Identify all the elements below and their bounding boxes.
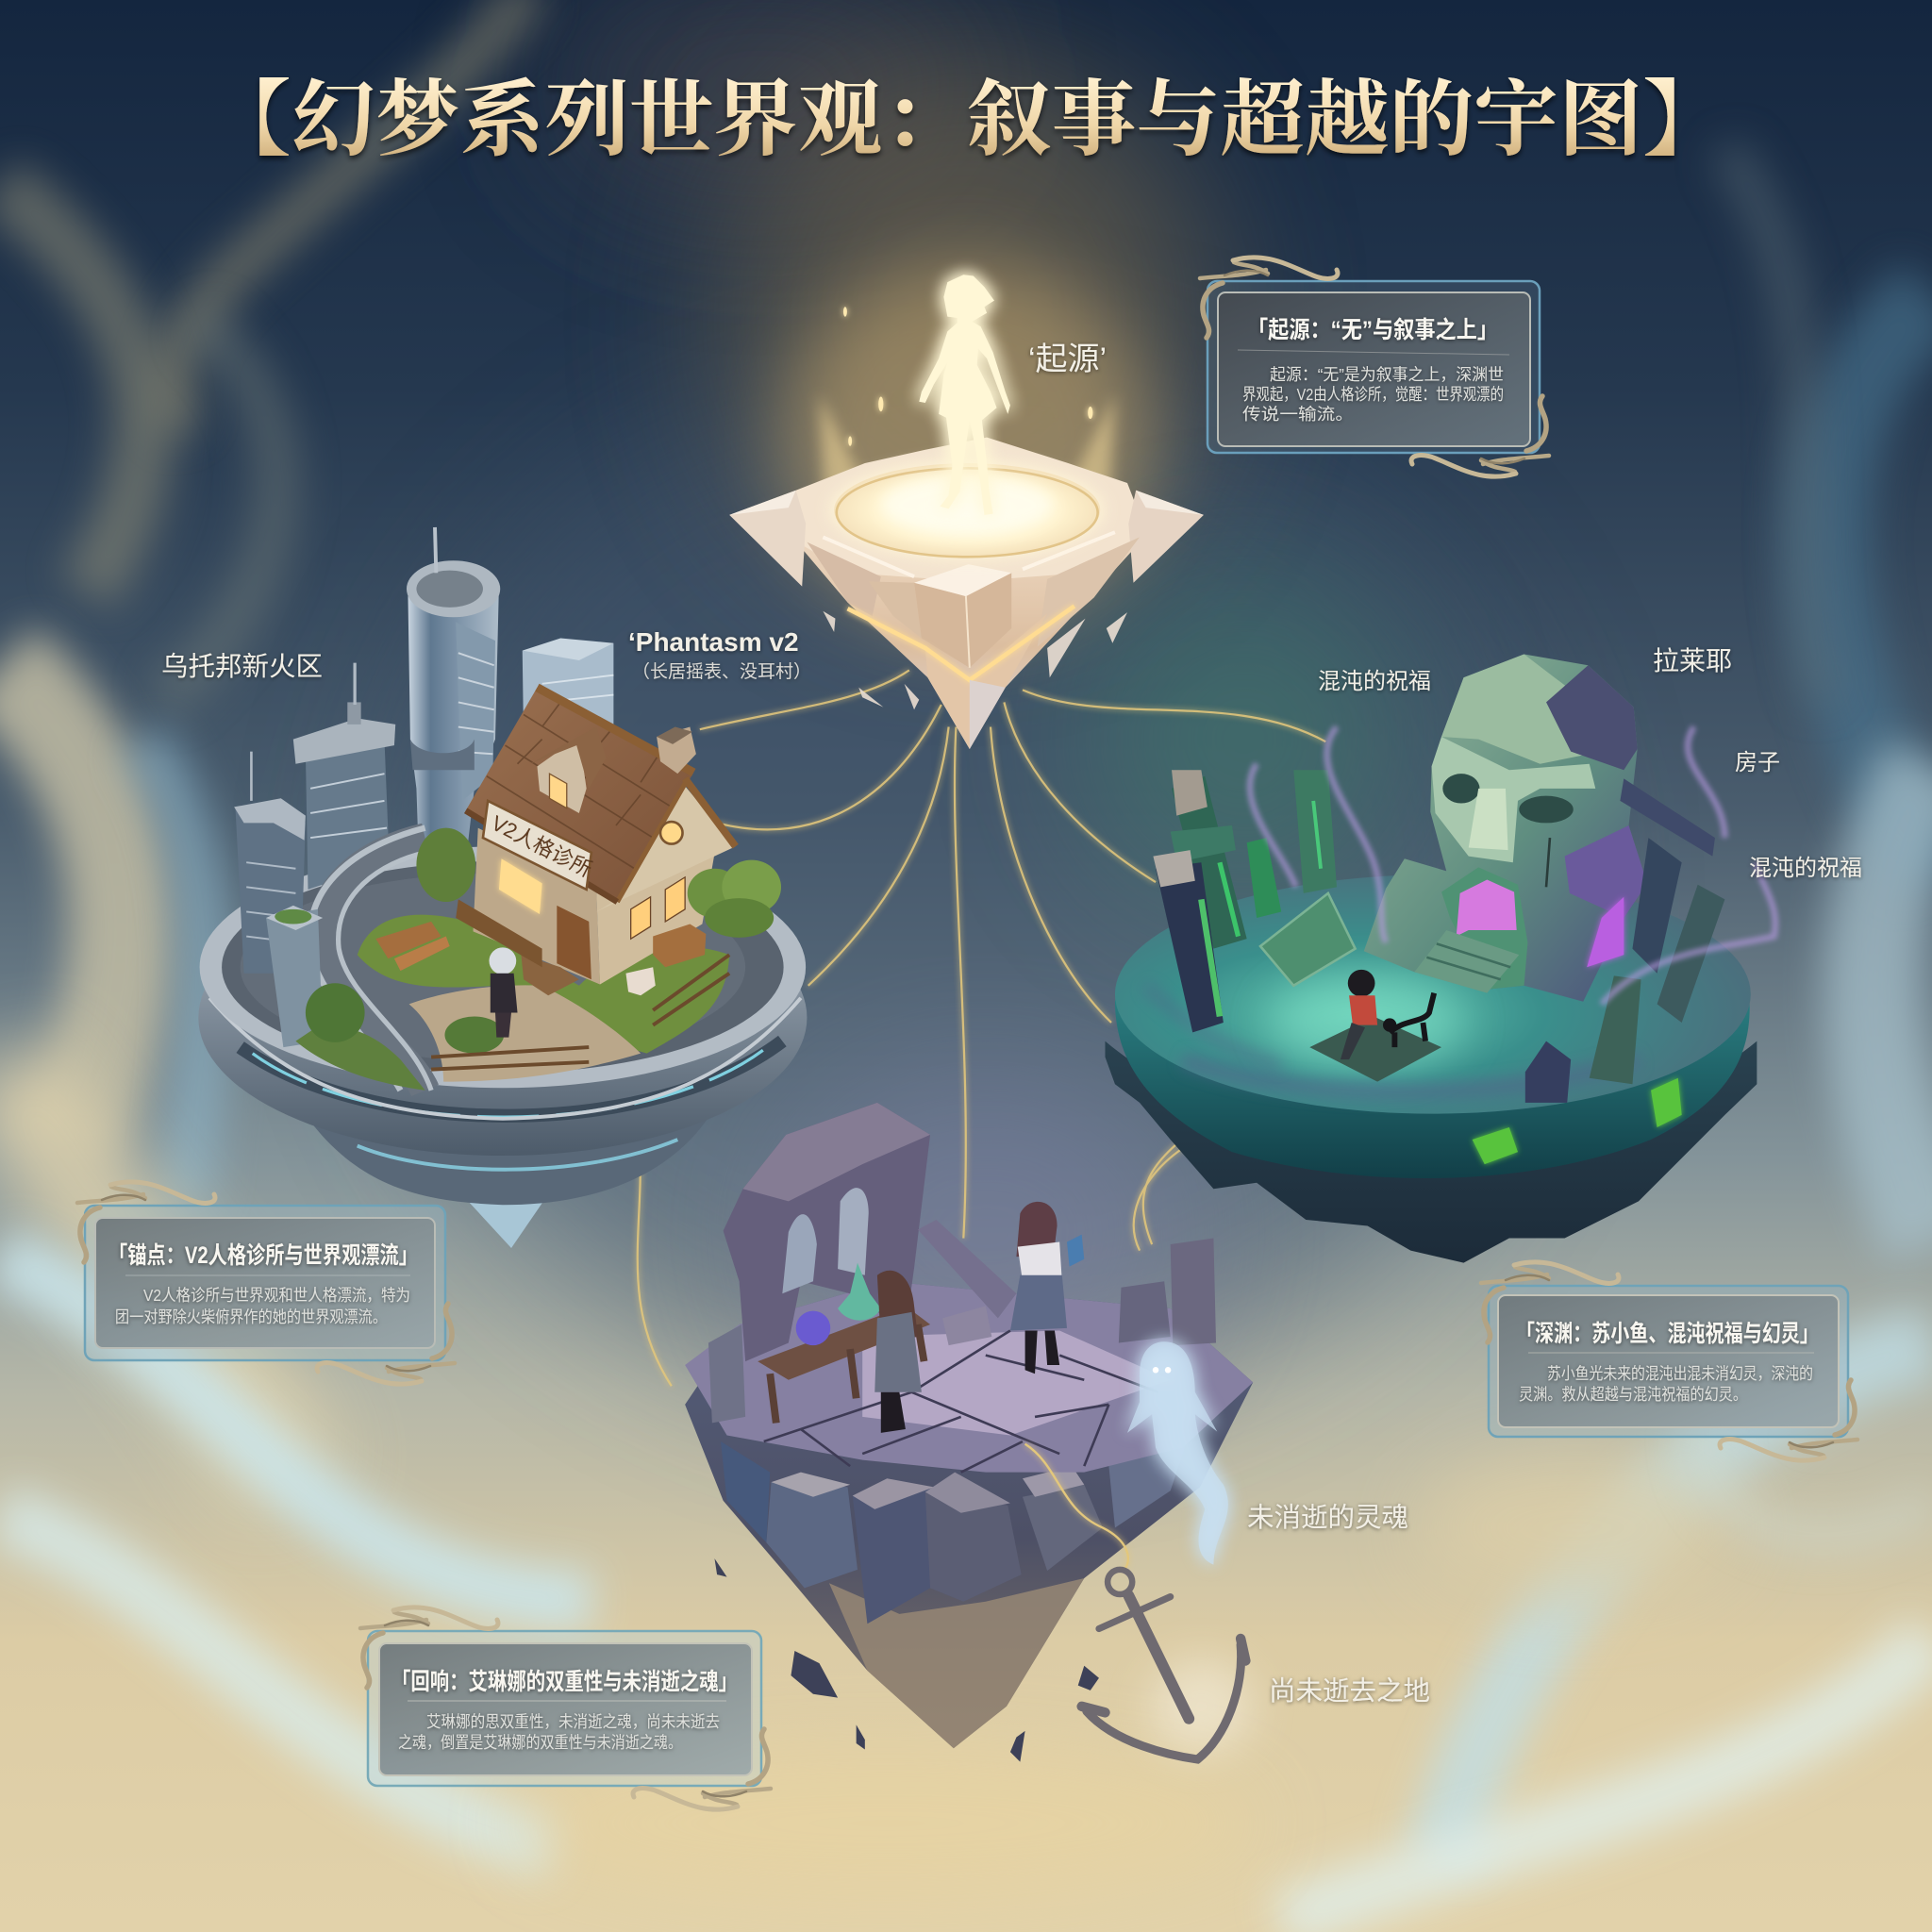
girl at table (874, 1271, 922, 1433)
panel: origin: 起源：“无”是为叙事之上，深渊世 (1270, 365, 1504, 384)
left island: utopia and clinic (198, 527, 807, 1248)
girl and cat on stone (1309, 970, 1441, 1082)
tree right and crates (653, 860, 781, 967)
panel: abyss: 苏小鱼光未来的混沌出混未消幻灵，深沌的 (1547, 1364, 1813, 1383)
bottom island: ruins (685, 1103, 1253, 1762)
panel: origin: 「起源：“无”与叙事之上」 (1247, 316, 1498, 343)
glowing disc (829, 459, 1105, 560)
panel: echo: 艾琳娜的思双重性，未消逝之魂，尚未未逝去 (426, 1712, 720, 1731)
bench (375, 922, 450, 971)
scene labels: 混沌的祝福 (1318, 669, 1431, 694)
scene labels (161, 341, 1862, 1707)
garden ground (295, 915, 729, 1091)
road ring (200, 846, 806, 1088)
panel: anchor: 「锚点：V2人格诊所与世界观漂流」 (108, 1242, 418, 1269)
panel: origin (1200, 258, 1549, 476)
stone tablet (1260, 893, 1356, 986)
stairs (1414, 930, 1519, 993)
door and steps (557, 906, 591, 979)
broken column (1119, 1239, 1216, 1345)
mailbox (625, 967, 656, 995)
origin crystal island (729, 258, 1204, 749)
panel: anchor: V2人格诊所与世界观和世人格漂流，特为 (143, 1286, 410, 1305)
portal (1441, 867, 1527, 990)
disc rim (198, 879, 807, 1156)
arch ruin (708, 1103, 930, 1423)
scene labels: 房子 (1735, 750, 1780, 775)
tree left (416, 828, 475, 902)
title: 【幻梦系列世界观：叙事与超越的宇图】 (207, 75, 1727, 167)
windows (499, 858, 542, 914)
panel: abyss (1481, 1262, 1857, 1460)
scene labels: ‘起源’ (1028, 341, 1107, 377)
panel: anchor (77, 1182, 455, 1384)
panel: abyss: 「深渊：苏小鱼、混沌祝福与幻灵」 (1516, 1321, 1819, 1347)
floating shards (823, 611, 1127, 709)
panel: origin: 界观起，V2由人格诊所，觉醒：世界观漂的 (1242, 385, 1504, 404)
panel: abyss: 灵渊。救从超越与混沌祝福的幻灵。 (1519, 1385, 1747, 1404)
panel: origin: 传说一输流。 (1242, 405, 1354, 424)
scene labels: 混沌的祝福 (1749, 856, 1862, 881)
panel: echo: 之魂，倒置是艾琳娜的双重性与未消逝之魂。 (398, 1733, 682, 1752)
crystal (1587, 897, 1624, 967)
scene labels: （长居摇表、没耳村） (632, 661, 811, 682)
tall tower (407, 527, 500, 862)
cliff blocks (721, 1435, 1189, 1624)
right island: abyss (1105, 654, 1775, 1263)
curved road (309, 828, 431, 1091)
ghost (1127, 1341, 1228, 1565)
crystal body (729, 438, 1204, 749)
purple smoke (1250, 727, 1775, 1004)
mid building (293, 663, 395, 890)
fallen slab (918, 1220, 1016, 1345)
thread on cliff (1025, 1444, 1128, 1571)
clinic sign: V2人格诊所 (488, 811, 595, 882)
scene labels: 乌托邦新火区 (161, 652, 323, 682)
glowing figure silhouette (919, 275, 1010, 515)
girl with book (1010, 1202, 1084, 1374)
panel: anchor: 团一对野除火柴俯界作的她的世界观漂流。 (115, 1307, 387, 1326)
golden threads (625, 670, 1325, 1386)
panel: echo (360, 1607, 771, 1809)
small character (489, 947, 518, 1038)
dormer (530, 727, 607, 813)
house (456, 688, 736, 995)
paved top (685, 1281, 1253, 1473)
chimney (657, 727, 696, 774)
scene labels: 拉莱耶 (1653, 646, 1732, 675)
rock debris (714, 1558, 1099, 1762)
light rays (819, 394, 1115, 518)
scene labels: ‘Phantasm v2 (628, 627, 799, 657)
sparks (843, 307, 1092, 446)
stone head (1364, 654, 1647, 1002)
water side (1115, 1000, 1750, 1178)
scene labels: 尚未逝去之地 (1269, 1676, 1430, 1707)
table (758, 1263, 930, 1423)
rock base (1105, 1041, 1757, 1263)
water surface (1115, 874, 1751, 1114)
cliff body (685, 1281, 1253, 1748)
anchor (1082, 1570, 1253, 1759)
right ruins (1525, 778, 1724, 1103)
scene labels: 未消逝的灵魂 (1247, 1503, 1408, 1533)
panel: echo: 「回响：艾琳娜的双重性与未消逝之魂」 (391, 1668, 738, 1695)
left building (234, 752, 306, 974)
back glass tower (523, 639, 613, 740)
columns left (1153, 770, 1337, 1032)
underside cone (286, 1084, 727, 1248)
planter (266, 906, 323, 1047)
